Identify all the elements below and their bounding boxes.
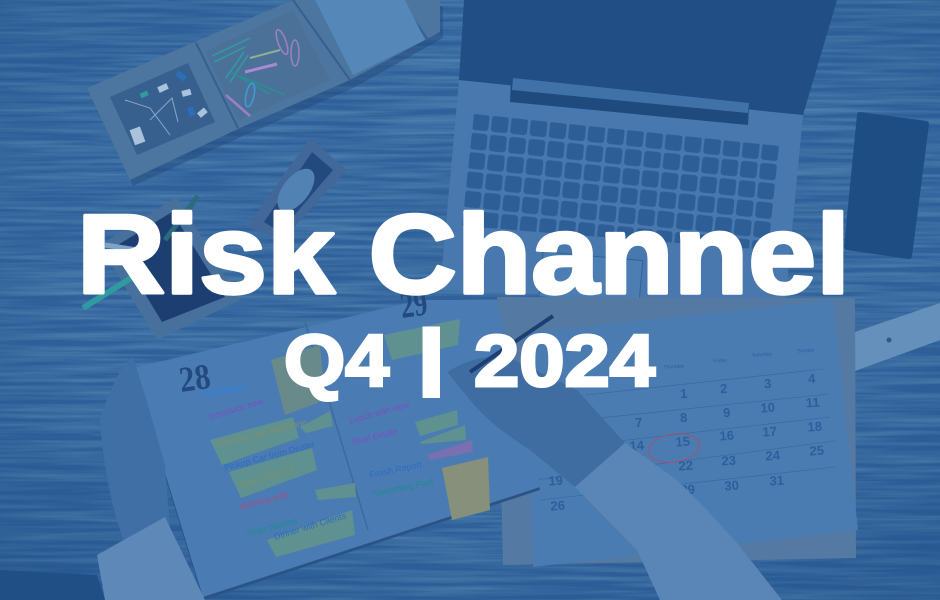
calendar weekday labels: Saturday [752,351,773,359]
right shirt sleeve [575,443,782,600]
left shirt sleeve [97,517,205,600]
laptop screen [459,0,837,115]
sticky notes [210,319,490,557]
day numbers: 29 [398,283,430,326]
calendar day numbers: 30 [724,478,739,493]
calendar day numbers: 14 [629,438,645,453]
calendar day numbers: 22 [678,458,693,473]
subtitle: Q4 | 2024: 2024 [474,321,655,402]
calendar weekday labels [663,347,815,371]
day numbers [177,283,430,400]
trackpad [539,252,643,305]
calendar day numbers: 4 [808,371,817,386]
calendar weekday labels: Sunday [797,347,815,355]
calendar weekday labels: Friday [713,358,728,364]
calendar day numbers: 9 [723,405,731,420]
handwritten notes: Lunch with new [348,399,411,426]
calendar day numbers: 15 [675,434,690,449]
handwritten notes: Introduce new [208,396,265,422]
calendar day numbers: 16 [719,428,734,443]
calendar day numbers: 10 [760,400,775,415]
laptop base [440,80,803,305]
handwritten notes: Swimming Pool [371,476,434,499]
left hand holding notebook [97,357,205,600]
handwritten notes: Yoga classes [245,515,299,538]
calendar day numbers: 24 [765,448,781,463]
handwritten notes: Pickup Car from Dealer [223,439,316,473]
calendar grid lines [530,369,835,500]
right hand and pen [447,316,782,600]
calendar day numbers: 1 [680,386,688,401]
calendar sheet [525,300,858,567]
handwritten notes: Meeting with [238,489,289,512]
handwritten notes [204,382,434,542]
title: Risk Channel: Risk Channel [77,192,850,317]
calendar day numbers [544,371,824,513]
calendar day numbers: 19 [548,473,563,488]
pin compartment [110,63,215,155]
subtitle: Q4 | 2024 [284,319,655,402]
handwritten notes: Select Service [238,464,296,490]
wall calendar pad [497,297,858,567]
handwritten notes: Real Estate [351,426,399,447]
calendar day numbers: 26 [550,498,565,513]
doctor appointment circle [646,431,702,465]
pencil holder [83,196,240,340]
subtitle: Q4 | 2024: Q4 [284,321,389,402]
calendar day numbers: 25 [809,443,824,458]
paper clip compartment [205,10,330,120]
calendar day numbers: 11 [805,395,820,410]
calendar day numbers: 8 [680,410,688,425]
calendar day numbers: 2 [720,381,728,396]
subtitle: Q4 | 2024: | [422,319,440,395]
ruler [852,303,940,371]
laptop [440,0,837,305]
calendar weekday labels: Thursday [663,363,685,371]
handwritten notes: Prepare new Milestone [216,417,308,449]
calendar day numbers: 3 [764,376,772,391]
calendar day numbers: 18 [807,419,822,434]
tape dispenser [247,138,347,240]
calendar day numbers: 23 [721,453,736,468]
open planner notebook [133,283,540,600]
bottom left shadow [0,570,105,600]
calendar day numbers: 12 [544,449,559,464]
calendar day numbers: 31 [769,473,784,488]
handwritten notes: Finish Report [368,459,423,480]
calendar day numbers: 7 [635,415,643,430]
handwritten notes: Dinner with Clients [273,510,348,542]
sticky note compartment [315,0,425,75]
keyboard [462,114,779,250]
calendar day numbers: 17 [762,424,777,439]
organizer tray with pins and clips [87,0,443,186]
handwritten notes: Meditation [204,382,246,399]
hinge [510,78,749,125]
day numbers: 28 [177,356,213,400]
smartphone [847,115,926,256]
calendar day numbers: 29 [680,482,695,497]
